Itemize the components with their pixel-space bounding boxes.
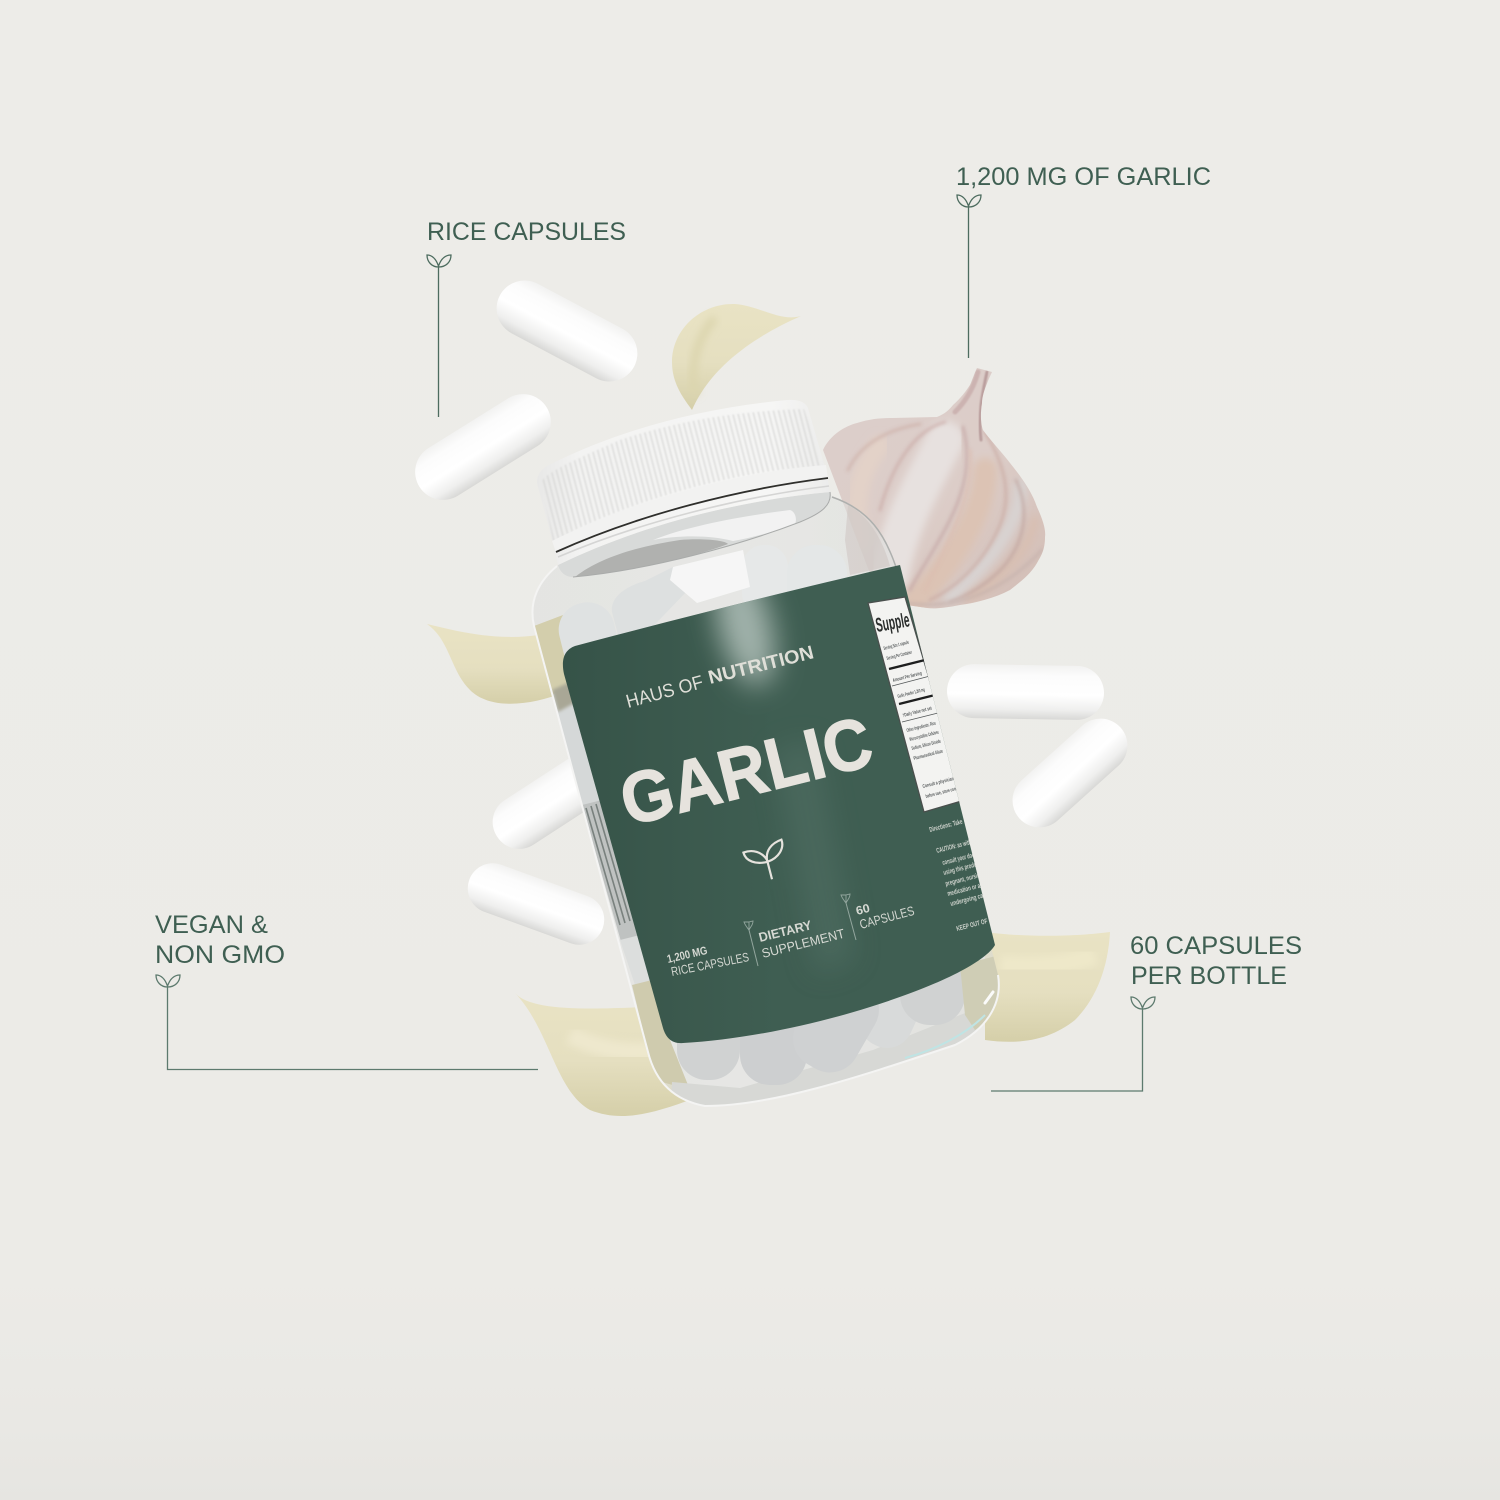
supplement facts panel: Serving Per Container (886, 650, 913, 662)
bottle (532, 400, 1006, 1120)
bottle cap (537, 400, 830, 565)
callout: garlic dose (956, 163, 1211, 358)
directions and caution text: CAUTION: as with any (936, 837, 980, 855)
supplement facts panel (868, 597, 965, 812)
supplement facts panel: Serving Size 1 capsule (883, 640, 910, 652)
callout text (1130, 932, 1302, 990)
directions and caution text: pregnant, nursing (945, 872, 983, 888)
callout text: RICE CAPSULES (427, 218, 626, 246)
callout text: 1,200 MG OF GARLIC (956, 163, 1211, 191)
supplement facts panel: Microcrystalline Cellulose (909, 730, 940, 743)
directions and caution text: medication or are (947, 882, 985, 898)
clove: top (672, 304, 801, 410)
label footer: CAPSULES (858, 903, 916, 932)
callout text: 60 CAPSULES (1130, 932, 1302, 960)
supplement facts panel: Amount Per Serving (892, 671, 923, 684)
glass edge and reflections (532, 497, 999, 1106)
capsule: right 2 (1001, 707, 1139, 839)
directions and caution text (929, 820, 990, 931)
supplement facts panel: Pharmaceutical Glaze (913, 749, 944, 762)
brand name: HAUS OF (624, 672, 706, 713)
label footer: SUPPLEMENT (760, 926, 846, 961)
clove: middle left (427, 624, 565, 704)
brand name: NUTRITION (706, 642, 816, 689)
capsule: right 1 (947, 664, 1104, 720)
directions and caution text: using this product (943, 861, 982, 877)
callout text (155, 911, 285, 969)
supplement facts panel: Consult a physician (922, 776, 954, 790)
supplement facts panel: Sodium, Silicon Dioxide (911, 739, 942, 752)
directions and caution text: Directions: Take (929, 819, 963, 834)
capsules inside bottle (534, 505, 1002, 1120)
callout text: PER BOTTLE (1131, 962, 1287, 990)
bottle neck reflections (558, 492, 830, 577)
supplement facts panel: Other Ingredients: Rice (906, 721, 937, 734)
icon: sprout and leader line (991, 997, 1155, 1091)
label footer: RICE CAPSULES (670, 950, 750, 979)
directions and caution text: undergoing care (950, 892, 988, 908)
capsule: top left 1 (487, 271, 647, 391)
callout text: NON GMO (155, 941, 285, 969)
glass body (532, 495, 999, 1106)
supplement facts panel: before use, store cool (925, 786, 958, 800)
callout: vegan and non gmo (155, 911, 538, 1070)
icon: sprout and leader line (156, 975, 538, 1070)
icon: sprout and leader line (427, 255, 451, 417)
capsule: left 2 (461, 856, 611, 952)
clove: bottom left (515, 993, 695, 1116)
green label (563, 558, 1006, 1043)
icon: sprout and leader line (957, 195, 981, 358)
supplement facts panel: Garlic Powder 1,200 mg (897, 687, 926, 700)
product title: GARLIC (613, 702, 880, 842)
label footer (666, 894, 916, 979)
callout: capsule count (991, 932, 1302, 1091)
label footer: 1,200 MG (666, 945, 709, 966)
directions and caution text: consult your doctor (942, 851, 980, 867)
clove: bottom right (985, 932, 1110, 1042)
garlic bulb (823, 368, 1045, 608)
label footer: 60 (854, 901, 872, 918)
brand name (624, 642, 816, 713)
callout text: VEGAN & (155, 911, 268, 939)
capsule: left 1 (483, 744, 621, 859)
icon: sprout on label (743, 840, 790, 884)
callout: rice capsules (427, 218, 626, 417)
capsule: top left 2 (405, 384, 561, 510)
supplement facts panel: †Daily Value not set (902, 706, 933, 719)
directions and caution text: KEEP OUT OF REACH (956, 914, 1006, 933)
supplement heading: Supple (874, 609, 911, 637)
label footer: DIETARY (757, 917, 813, 945)
